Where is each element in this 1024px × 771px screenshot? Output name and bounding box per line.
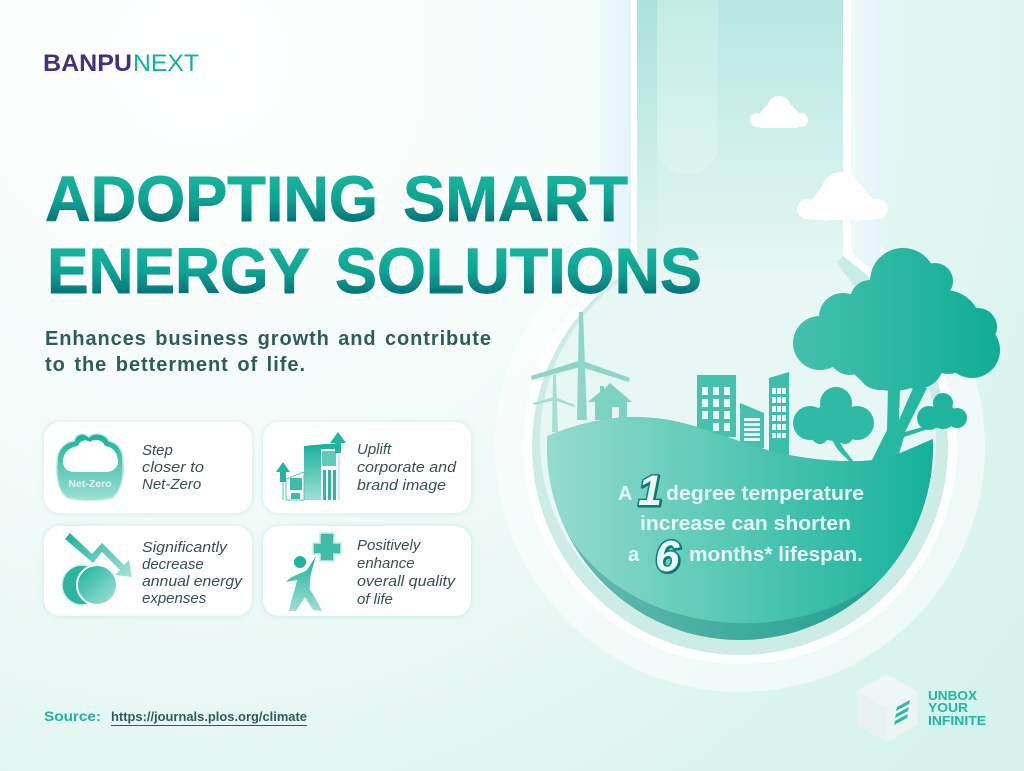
card text: Net-Zero — [142, 476, 201, 493]
subtitle: to the betterment of life. — [45, 354, 305, 376]
card text — [357, 537, 457, 608]
source line: https://journals.plos.org/climate — [111, 709, 307, 724]
title: ADOPTING — [45, 163, 378, 235]
callout: temperature and lifespan: a — [628, 544, 640, 566]
title — [45, 163, 702, 307]
subtitle — [45, 328, 491, 376]
panel: step closer to net-zero — [44, 422, 252, 513]
title: SMART — [403, 163, 628, 235]
card text: overall quality — [357, 573, 457, 590]
tagline: unbox your infinite: INFINITE — [928, 713, 986, 728]
numeral 1: 1 — [638, 467, 662, 515]
flask illustration — [495, 0, 1024, 692]
card text: Positively — [357, 537, 422, 554]
house — [588, 383, 632, 420]
title: SOLUTIONS — [335, 235, 702, 307]
large wind turbine — [531, 312, 630, 420]
logo: Banpu Next — [43, 50, 199, 77]
title: ENERGY — [47, 235, 310, 307]
numeral 6: 6 — [655, 532, 680, 581]
callout: temperature and lifespan: months* lifespan. — [689, 544, 863, 566]
card text: enhance — [357, 555, 415, 572]
card text: corporate and — [357, 459, 457, 476]
callout: temperature and lifespan — [618, 467, 864, 581]
source line — [44, 708, 307, 726]
source line: Source: — [44, 708, 101, 724]
subtitle: Enhances business growth and contribute — [45, 328, 491, 350]
card text — [357, 441, 457, 494]
icon: net-zero cloud: Net-Zero — [68, 478, 112, 490]
card text: Uplift — [357, 441, 392, 458]
large cloud — [797, 172, 888, 221]
logo: Banpu Next: NEXT — [133, 50, 199, 77]
tagline: unbox your infinite — [928, 688, 986, 728]
right backdrop band — [880, 0, 1024, 300]
card text — [142, 442, 204, 493]
small tree right — [917, 393, 967, 430]
card text: decrease — [142, 556, 204, 573]
small tree left — [793, 387, 874, 462]
panel: decrease annual energy expenses — [44, 526, 252, 616]
flask bulb outer ring — [495, 202, 985, 692]
card text — [142, 539, 244, 607]
tagline: unbox your infinite: YOUR — [928, 700, 969, 715]
tree trunk — [870, 388, 931, 464]
panel: enhance quality of life — [263, 526, 471, 616]
flask neck walls — [600, 0, 880, 279]
card text: expenses — [142, 590, 207, 607]
card text: annual energy — [142, 573, 244, 590]
panel: uplift corporate and brand image — [263, 422, 471, 513]
callout: temperature and lifespan: increase can shorten — [640, 513, 851, 535]
icon: falling arrow and coins — [62, 533, 132, 605]
tagline: unbox your infinite: UNBOX — [928, 688, 977, 703]
small wind turbine — [533, 375, 575, 432]
callout: temperature and lifespan: degree temperature — [666, 483, 864, 505]
icon: white cube — [857, 674, 917, 742]
card text: Step — [142, 442, 173, 459]
logo: Banpu Next: BANPU — [43, 50, 132, 77]
liquid hill — [540, 417, 940, 650]
flask neck interior — [637, 0, 872, 292]
icon: person reaching for health cross — [286, 533, 341, 611]
card text: brand image — [357, 477, 446, 494]
icon: buildings with up arrows — [276, 432, 346, 500]
callout: temperature and lifespan: A — [618, 483, 632, 505]
small cloud — [750, 96, 808, 128]
building: left tower — [697, 375, 736, 437]
large tree — [793, 248, 1000, 464]
flask bulb inner glass — [523, 230, 957, 664]
card text: of life — [357, 591, 393, 608]
tree crown — [793, 248, 1000, 391]
card text: closer to — [142, 459, 204, 476]
card text: Significantly — [142, 539, 229, 556]
building: middle — [740, 403, 764, 448]
building: right tower — [769, 372, 789, 456]
icon: net-zero cloud — [57, 434, 123, 500]
